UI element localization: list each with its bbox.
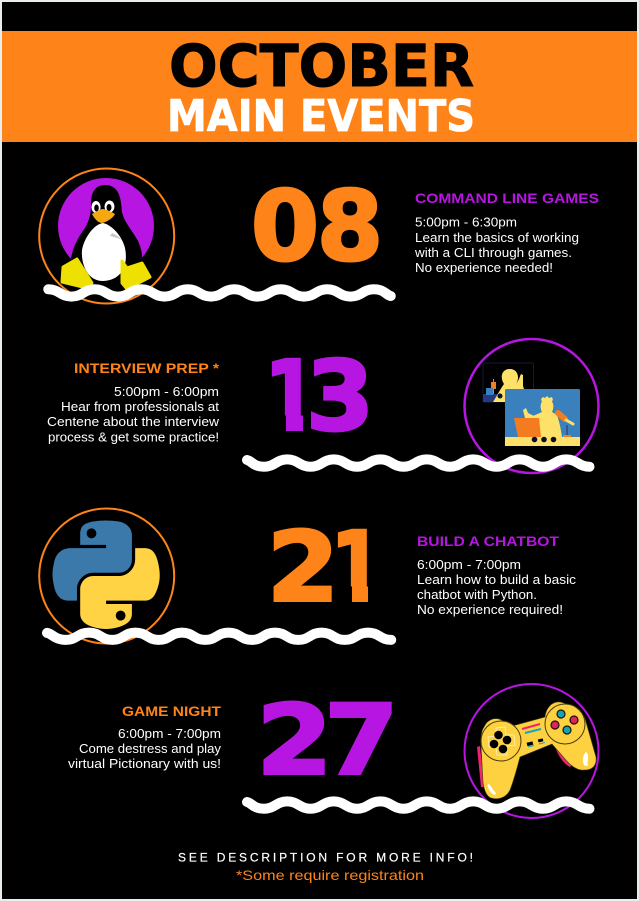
event text: Game Night: GAME NIGHT — [122, 704, 222, 719]
date number 27: 2 — [256, 684, 332, 796]
event text: Interview Prep: Centene about the interview — [47, 415, 220, 429]
icon: game controller — [464, 684, 598, 818]
wave divider — [247, 459, 590, 467]
date number 21: 1 — [330, 512, 384, 624]
event text: Build a Chatbot: BUILD A CHATBOT — [417, 534, 560, 549]
icon: video call illustration — [464, 339, 598, 473]
date number 21 — [267, 512, 392, 624]
event text: Game Night — [68, 704, 222, 771]
date number 13: 1 — [264, 340, 318, 452]
event text: Command Line Games: 5:00pm - 6:30pm — [415, 216, 517, 230]
date number 27 — [256, 684, 398, 796]
event text: Game Night: Come destress and play — [79, 742, 222, 756]
event text: Interview Prep: INTERVIEW PREP * — [74, 361, 220, 376]
event text: Build a Chatbot: chatbot with Python. — [417, 588, 537, 602]
date number 08: 8 — [317, 170, 383, 282]
event text: Build a Chatbot: No experience required! — [417, 603, 563, 617]
date number 13: 3 — [306, 340, 374, 452]
title: Main Events: MAIN EVENTS — [167, 91, 475, 142]
icon: Python logo — [39, 508, 174, 644]
event: Oct 27 — [68, 684, 598, 818]
wave divider — [48, 289, 391, 297]
date number 27: 7 — [324, 684, 398, 796]
event text: Command Line Games: COMMAND LINE GAMES — [415, 191, 599, 206]
wave divider — [247, 801, 590, 809]
icon: Linux penguin — [39, 168, 174, 304]
registration note: *Some require registration — [236, 867, 424, 883]
event text: Command Line Games: No experience needed! — [415, 261, 553, 275]
event: Oct 08 — [39, 168, 599, 304]
event text: Command Line Games — [414, 191, 599, 275]
event: Oct 13 — [47, 339, 598, 473]
date number 13 — [258, 340, 374, 452]
event text: Build a Chatbot: Learn how to build a basic — [417, 573, 576, 587]
event text: Interview Prep: process & get some practice! — [48, 430, 219, 444]
footer note: SEE DESCRIPTION FOR MORE INFO! — [178, 850, 473, 864]
event text: Game Night: virtual Pictionary with us! — [68, 757, 221, 771]
footer note — [178, 850, 473, 883]
event text: Command Line Games: Learn the basics of working — [415, 231, 579, 245]
event text: Game Night: 6:00pm - 7:00pm — [118, 727, 221, 741]
wave divider — [47, 633, 391, 640]
date number 21: 2 — [267, 512, 339, 624]
event text: Interview Prep: 5:00pm - 6:00pm — [114, 385, 219, 399]
event text: Command Line Games: with a CLI through games. — [414, 246, 572, 260]
event text: Interview Prep — [47, 361, 220, 444]
event: Oct 21 — [39, 508, 576, 644]
event text: Build a Chatbot: 6:00pm - 7:00pm — [417, 558, 521, 572]
event text: Build a Chatbot — [417, 534, 576, 617]
event text: Interview Prep: Hear from professionals at — [61, 400, 220, 414]
date number 08 — [251, 170, 383, 282]
date number 08: 0 — [251, 170, 319, 282]
header band — [2, 31, 637, 142]
title: October: OCTOBER — [169, 32, 474, 100]
